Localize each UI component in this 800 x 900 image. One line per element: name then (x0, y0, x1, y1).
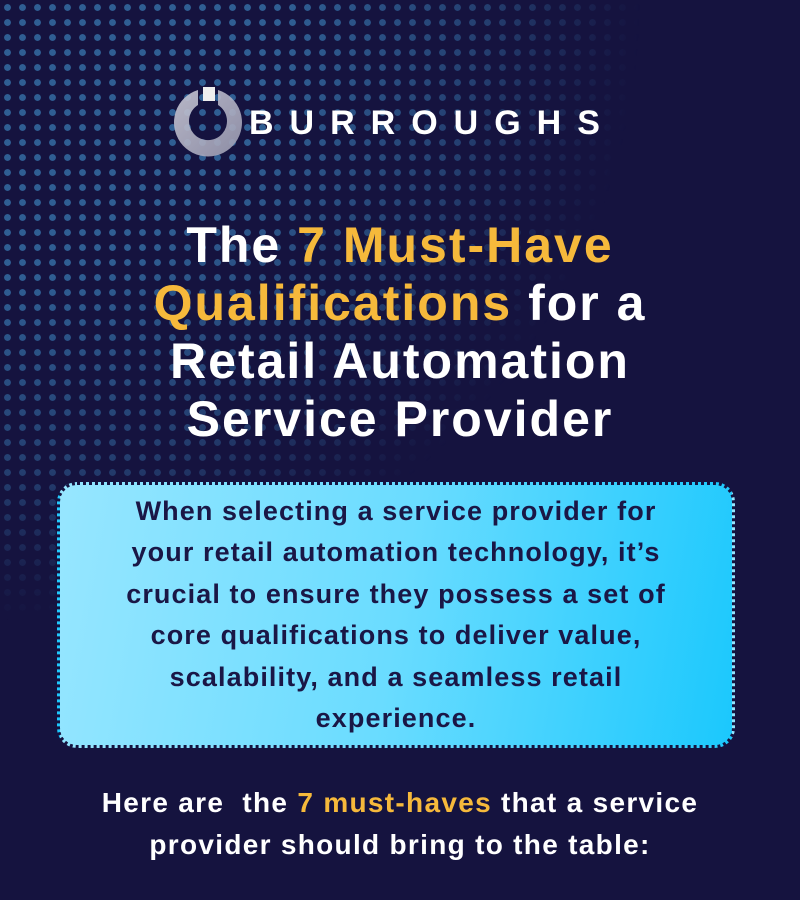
intro box: experience. (316, 703, 476, 733)
title: Service Provider (187, 391, 613, 447)
subheading (102, 787, 698, 860)
logo (174, 87, 616, 156)
intro box: scalability, and a seamless retail (170, 662, 622, 692)
subheading: Here are the 7 must-haves that a service (102, 787, 698, 818)
title: Qualifications for a (154, 275, 646, 331)
intro box (57, 482, 735, 748)
subheading: provider should bring to the table: (149, 829, 651, 860)
title: Retail Automation (170, 333, 630, 389)
logo text: BURROUGHS (249, 104, 616, 142)
icon: logo ring (174, 87, 242, 156)
intro box: your retail automation technology, it’s (132, 537, 660, 567)
intro box: crucial to ensure they possess a set of (126, 578, 666, 608)
title (154, 217, 646, 447)
intro box: core qualifications to deliver value, (151, 620, 641, 650)
title: The 7 Must-Have (186, 217, 614, 273)
intro box: When selecting a service provider for (136, 496, 656, 526)
